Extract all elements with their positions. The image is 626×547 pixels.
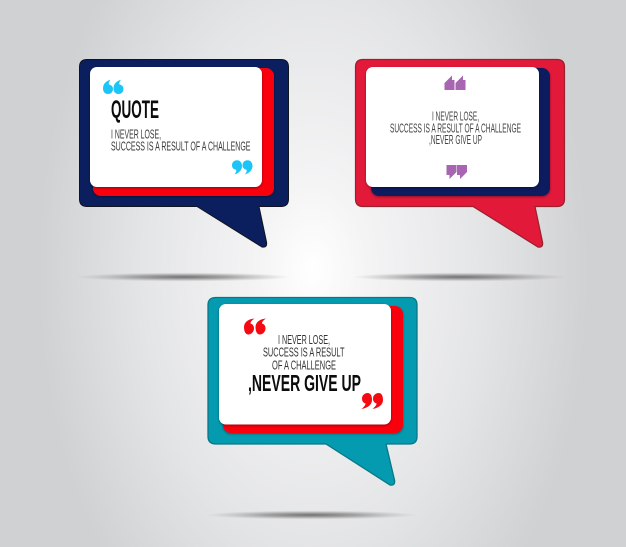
quote text xyxy=(111,128,250,154)
speech bubble teal xyxy=(208,298,417,485)
icon: opening quote cyan xyxy=(103,80,124,94)
icon: closing quote cyan xyxy=(232,160,252,174)
ground shadow bottom xyxy=(205,510,417,520)
quote text: I NEVER LOSE, xyxy=(111,128,161,142)
ground shadow right xyxy=(352,272,568,282)
white card xyxy=(366,67,539,187)
quote text: SUCCESS IS A RESULT OF A CHALLENGE xyxy=(111,140,250,154)
speech bubble navy xyxy=(80,60,288,247)
panel: navy quote bubble xyxy=(80,60,288,247)
quote text: SUCCESS IS A RESULT xyxy=(263,345,345,360)
navy back card xyxy=(371,68,550,196)
red back card xyxy=(223,306,403,433)
red back card xyxy=(93,68,274,196)
quote text: OF A CHALLENGE xyxy=(272,358,336,372)
icon: closing quote purple xyxy=(446,165,467,179)
quote text xyxy=(263,332,345,372)
white card xyxy=(219,304,391,424)
ground shadow left xyxy=(75,272,291,282)
panel: teal quote bubble xyxy=(208,298,417,485)
icon: opening quote purple xyxy=(444,76,466,90)
quote text: ,NEVER GIVE UP xyxy=(429,133,482,147)
quote text: I NEVER LOSE, xyxy=(432,110,479,124)
speech bubble red xyxy=(356,60,564,247)
heading: QUOTE: QUOTE xyxy=(111,96,159,124)
icon: opening quote red xyxy=(244,318,266,334)
quote text: I NEVER LOSE, xyxy=(278,332,330,347)
panel: red quote bubble xyxy=(356,60,564,247)
icon: closing quote red xyxy=(362,393,383,409)
emphasis text: ,NEVER GIVE UP xyxy=(248,370,361,396)
white card xyxy=(90,67,262,187)
quote text xyxy=(390,110,521,147)
